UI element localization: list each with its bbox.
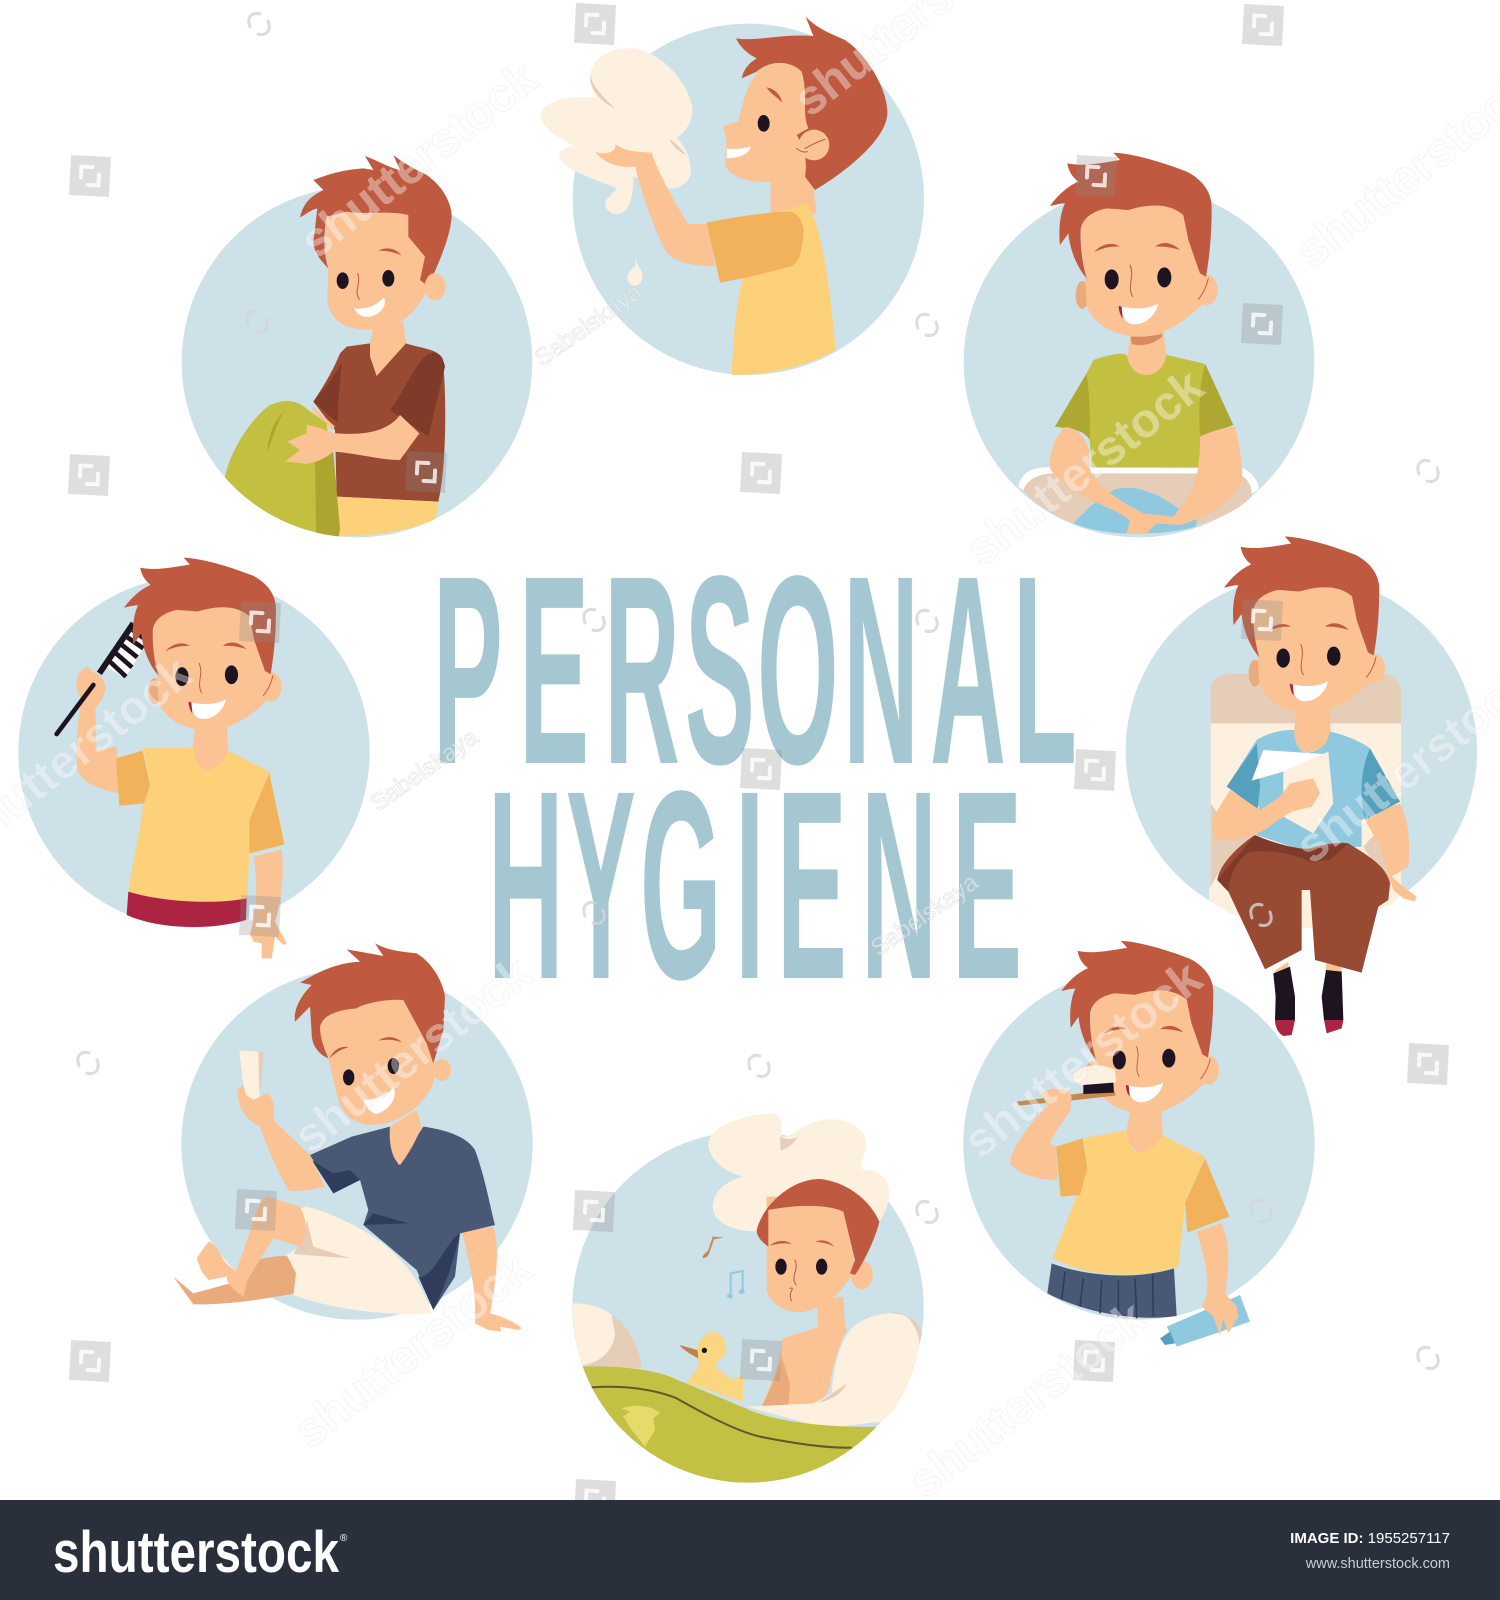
dark blue sleeves: [1227, 743, 1400, 820]
face in profile: [723, 60, 813, 190]
rubber duck: [679, 1332, 743, 1402]
toilet seat: [1209, 723, 1401, 928]
torso shade: [762, 1357, 790, 1407]
ear: [799, 130, 829, 160]
website: www.shutterstock.com: [1305, 1556, 1450, 1572]
circle background: [572, 1131, 924, 1483]
circle background: [182, 187, 532, 537]
olive sleeves: [1055, 363, 1233, 440]
heading line: HYGIENE: HYGIENE: [488, 736, 1022, 1036]
hair: [736, 17, 887, 190]
nose: [357, 273, 359, 299]
smile: [364, 1087, 395, 1114]
eyebrow: [767, 87, 782, 103]
hand on toothbrush: [1042, 1089, 1072, 1112]
tube cap: [1160, 1332, 1175, 1345]
comb teeth backing: [107, 623, 145, 678]
panel: combing hair: [18, 558, 370, 958]
heading line: PERSONAL: PERSONAL: [433, 521, 1077, 821]
dark sleeves: [313, 353, 445, 437]
shorts shade: [293, 1220, 350, 1258]
raised arm: [1010, 1107, 1072, 1180]
circle background: [964, 187, 1314, 537]
tub rim line: [592, 1387, 852, 1448]
water: [1073, 488, 1197, 534]
neck: [390, 1110, 422, 1165]
eyebrow: [378, 248, 401, 255]
raised arm and hand: [237, 1085, 325, 1191]
sleeves: [116, 751, 284, 853]
toothpaste tube: [1167, 1295, 1250, 1347]
toothbrush handle: [1017, 1092, 1116, 1106]
raised arm and hand: [76, 666, 118, 793]
neck: [1294, 710, 1331, 752]
image id: IMAGE ID: 1955257117: [1290, 1530, 1450, 1547]
neck: [1127, 1110, 1163, 1153]
watermark outline marks: [78, 14, 1438, 1368]
panel: on the toilet with paper: [1126, 536, 1477, 1036]
head: [1050, 153, 1218, 337]
neck: [193, 725, 228, 771]
back leg: [173, 1256, 296, 1304]
seat shade: [1211, 803, 1393, 890]
yellow shorts: [337, 497, 438, 536]
circle background: [18, 576, 370, 928]
cream tube: [239, 1051, 260, 1115]
foam on hand: [541, 48, 692, 214]
right arm: [1363, 803, 1417, 902]
brown t-shirt: [313, 343, 445, 502]
circle background: [963, 968, 1315, 1320]
neck: [771, 180, 817, 213]
eye: [758, 115, 770, 132]
shorts stripes: [1062, 1272, 1153, 1318]
eyes: [337, 270, 394, 289]
red sock toes: [1275, 1020, 1343, 1036]
tan foam behind tub right: [890, 1312, 922, 1347]
diagonal shutterstock watermarks: shutterstock: [284, 1241, 542, 1459]
music note orange: [703, 1237, 724, 1258]
brown shorts: [1217, 835, 1390, 973]
cistern: [1211, 674, 1401, 723]
foam shading right: [817, 1383, 847, 1403]
ear: [851, 1261, 873, 1289]
music note blue: [727, 1271, 745, 1298]
yellow t-shirt: [128, 747, 284, 902]
olive t-shirt: [1055, 354, 1233, 467]
front leg and foot: [197, 1197, 306, 1297]
circle background: [1126, 575, 1477, 927]
head: [320, 995, 435, 1125]
black socks: [1273, 967, 1343, 1020]
eyebrows: [770, 1240, 834, 1247]
eyes: [775, 1259, 827, 1275]
circle background: [181, 968, 533, 1320]
registered mark: ®: [340, 1533, 348, 1544]
forearm and hand: [285, 415, 419, 464]
sink: [1018, 467, 1259, 528]
sleeve: [707, 212, 804, 283]
diagonal author watermarks: Sabelskaya: [866, 868, 984, 962]
tan foam left: [583, 1315, 642, 1368]
eyes: [343, 1058, 399, 1085]
green bathtub: [582, 1366, 876, 1483]
tub highlight: [622, 1406, 660, 1447]
toilet paper: [1283, 752, 1333, 833]
foam right: [747, 1313, 919, 1428]
eyebrows: [329, 1037, 402, 1058]
footer logo: shutterstock: [53, 1520, 340, 1585]
green towel: [224, 401, 340, 536]
lower arm and hand: [1197, 1223, 1238, 1335]
smile: [354, 298, 385, 317]
lower arm and hand: [250, 849, 287, 958]
footer bar: [0, 1500, 1500, 1600]
foam shading: [590, 75, 687, 155]
arms and hands: [1050, 427, 1242, 533]
raised arm: [595, 144, 715, 266]
shorts shading: [1217, 835, 1348, 892]
comb: [57, 623, 144, 734]
navy t-shirt: [310, 1127, 495, 1310]
diagonal author watermarks: Sabelskaya: [530, 278, 648, 372]
smile: [727, 147, 751, 158]
foam left: [573, 1303, 615, 1365]
sleeves: [1056, 1138, 1229, 1233]
panel: drying with towel: [182, 155, 532, 573]
ear detail: [797, 139, 825, 152]
panel: washing hair with foam: [541, 17, 924, 375]
supporting arm: [462, 1227, 522, 1332]
head: [767, 1197, 855, 1312]
hair: [300, 155, 452, 287]
head: [1061, 941, 1219, 1114]
navy shorts: [1047, 1263, 1177, 1318]
diagonal shutterstock watermarks: shutterstock: [899, 1291, 1157, 1509]
yellow t-shirt: [732, 203, 836, 375]
title: Personal Hygiene: [433, 521, 1077, 1036]
panel: applying cream, sitting: [173, 943, 533, 1332]
hair: [295, 943, 445, 1063]
diagonal shutterstock watermarks: shutterstock: [284, 946, 542, 1164]
head: [1224, 536, 1385, 713]
foam on head: [708, 1113, 889, 1232]
cream shorts: [287, 1207, 432, 1314]
neck: [370, 322, 406, 376]
torso and neck: [762, 1297, 847, 1407]
panel: taking a bath with rubber duck: [572, 1113, 924, 1500]
panel: brushing teeth: [963, 941, 1315, 1347]
t-shirt shading: [312, 1160, 460, 1310]
ankles: [1273, 962, 1342, 973]
hair: [757, 1179, 879, 1275]
foam shading: [780, 1137, 798, 1150]
diagonal author watermarks: [366, 278, 984, 962]
panel: washing hands at sink: [964, 153, 1314, 537]
head: [124, 558, 282, 731]
circle background: [573, 24, 924, 375]
diagonal shutterstock watermarks: shutterstock: [954, 951, 1212, 1169]
blue t-shirt: [1227, 730, 1400, 850]
back arm: [312, 407, 335, 430]
toothpaste foam: [1073, 1065, 1116, 1085]
red shorts: [127, 892, 247, 927]
towel fold shading: [268, 410, 340, 536]
tube side: [258, 1052, 264, 1095]
bristles: [1083, 1083, 1114, 1094]
ear: [425, 273, 445, 300]
ear: [432, 1059, 451, 1081]
neck: [1127, 332, 1167, 375]
diagonal shutterstock watermarks: shutterstock: [290, 51, 548, 269]
yellow t-shirt: [1053, 1130, 1205, 1275]
falling foam drop: [628, 258, 643, 286]
neck shadow: [1131, 333, 1163, 345]
nose and whistling lips: [790, 1260, 796, 1301]
diagonal author watermarks: Sabelskaya: [366, 723, 484, 817]
diagonal shutterstock watermarks: shutterstock: [956, 359, 1214, 577]
left arm and hand: [1212, 778, 1320, 840]
head: [325, 206, 427, 330]
